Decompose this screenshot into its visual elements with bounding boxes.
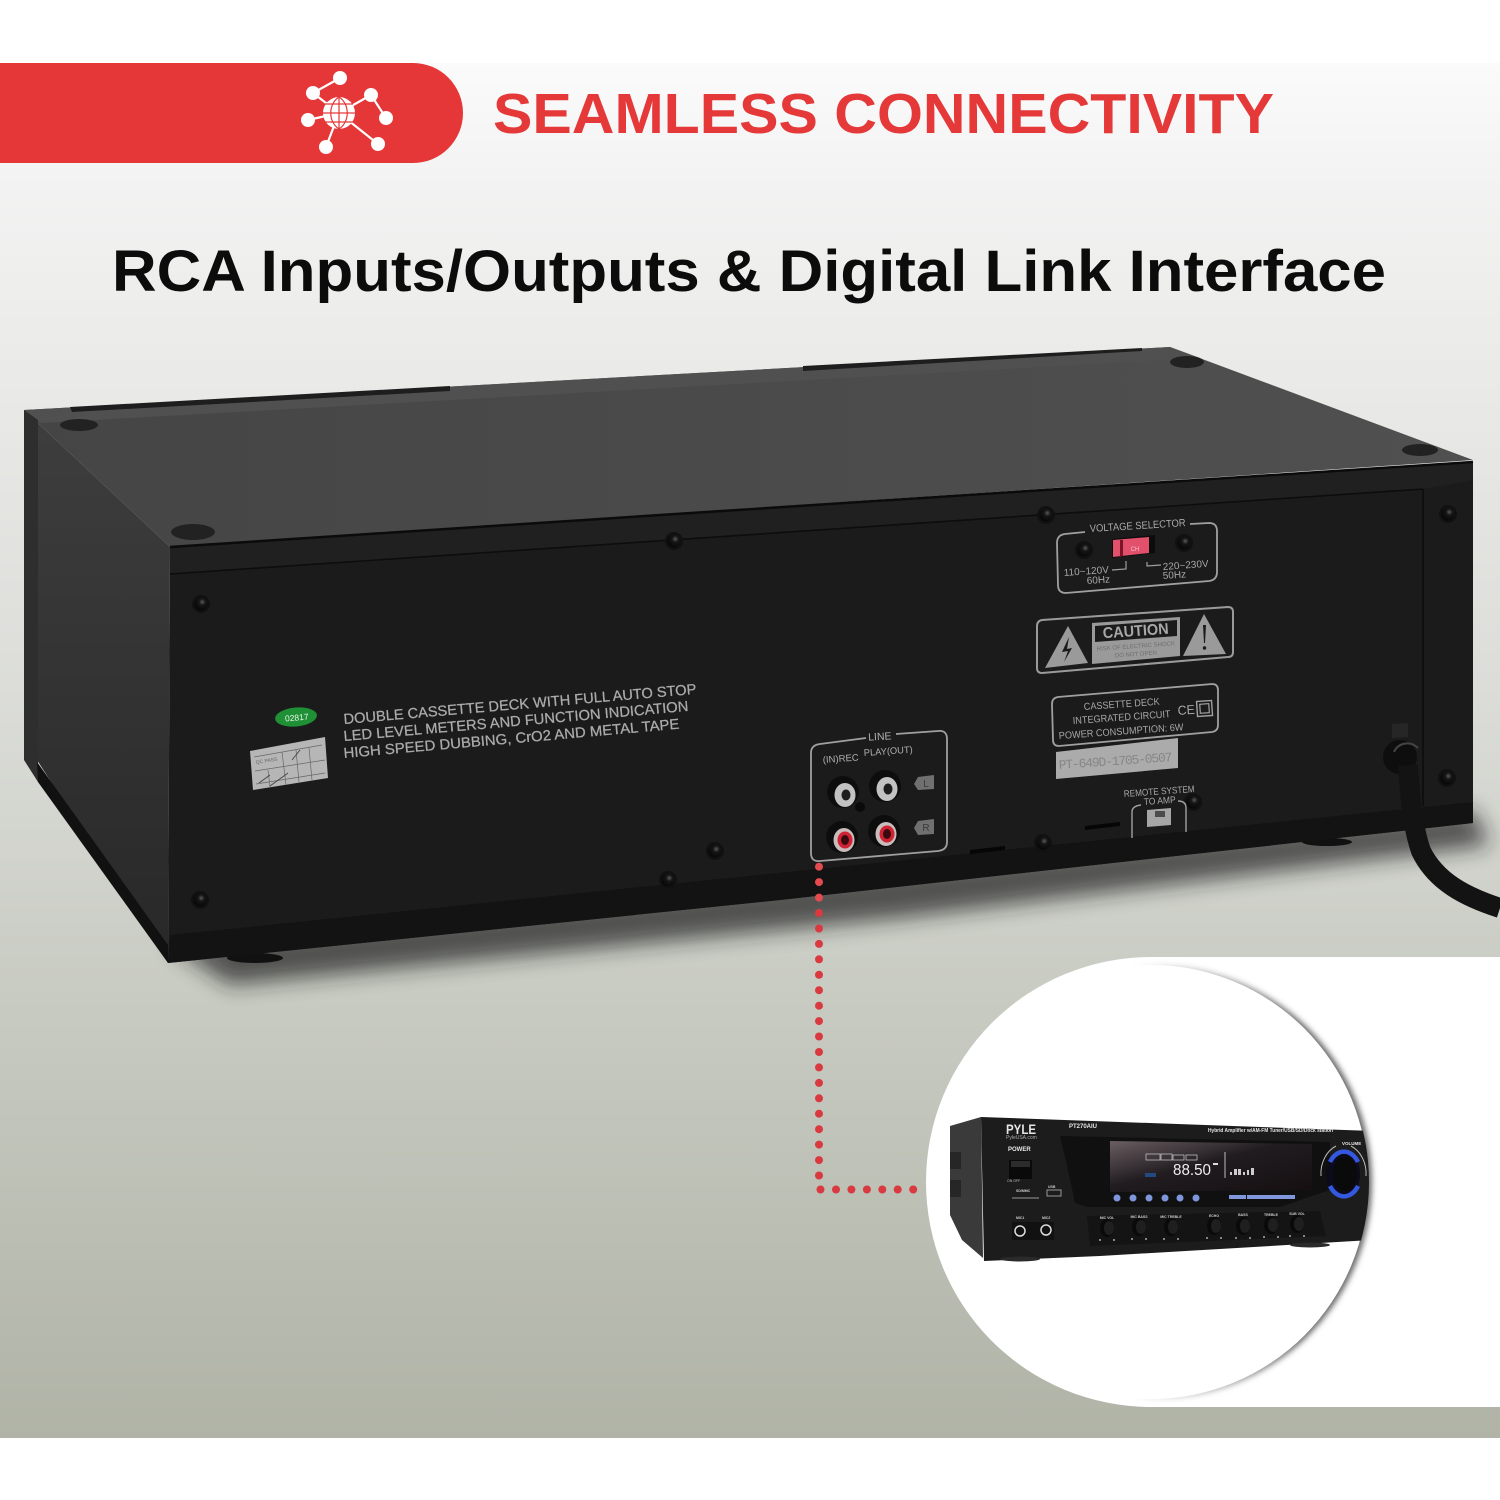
front face [168,462,1473,963]
serial number label: PT-649D-1705-0507 [1058,750,1173,773]
amp branding: VOLUME [1342,1141,1361,1146]
line connector panel: (IN)REC [822,752,859,766]
L and R tags: R [922,823,930,834]
subheading: RCA Inputs/Outputs & Digital Link Interface [112,239,1386,304]
voltage selector: 50Hz [1162,569,1187,582]
RCA jacks [826,770,901,853]
power switch: ON OFF [1007,1179,1020,1183]
control knobs: SUB VOL [1289,1212,1306,1216]
left side panel [24,410,170,963]
circle shadow [1151,964,1376,1400]
display screen: 88.50 [1173,1162,1211,1179]
voltage selector: 60Hz [1086,574,1111,587]
voltage selector: VOLTAGE SELECTOR [1089,517,1186,535]
voltage selector: 110~120V [1063,565,1110,579]
caution panel: CAUTION [1102,621,1169,642]
amp branding: POWER [1008,1147,1031,1153]
description text: LED LEVEL METERS AND FUNCTION INDICATION [343,699,689,745]
device shadow [170,810,1490,985]
L and R tags: L [923,779,929,790]
SD and USB ports: SD/MMC [1016,1189,1031,1193]
remote system port: REMOTE SYSTEM [1123,784,1195,800]
amp branding: PYLE [1006,1121,1036,1137]
display bezel [1060,1136,1330,1207]
amp branding: PT270AIU [1069,1124,1097,1130]
cassette deck info label: POWER CONSUMPTION: 6W [1058,722,1184,742]
line connector panel [811,730,947,861]
control knobs: MIC BASS [1130,1215,1148,1219]
amplifier photo [950,1117,1372,1262]
amp branding [1006,1124,1362,1151]
icon: network globe [301,71,393,154]
red switch: CH [1131,547,1139,553]
green sticker [274,706,318,728]
red switch [1112,535,1155,558]
mic jacks [1012,1216,1054,1240]
control knobs [1087,1211,1326,1246]
white callout backing [926,957,1500,1407]
QC sticker [250,737,328,790]
screws [191,505,1457,909]
amp branding: Hybrid Amplifier w/AM-FM Tuner/USB/SD/Dock station [1208,1128,1334,1134]
control knobs: MIC TREBLE [1160,1215,1182,1219]
cassette deck info label: CASSETTE DECK [1083,697,1160,713]
SD and USB ports [1012,1185,1061,1198]
voltage selector [1057,517,1217,593]
slots [970,822,1120,854]
caution panel: DO NOT OPEN [1115,651,1157,659]
cassette deck info label [1052,684,1218,746]
control knobs: TREBLE [1264,1213,1279,1217]
control knobs: ECHO [1209,1214,1219,1218]
front panel buttons [1114,1194,1295,1202]
remote system port [1123,784,1195,838]
SD and USB ports: USB [1048,1185,1056,1189]
serial number label [1056,738,1178,779]
caution panel [1092,617,1180,664]
L and R tags [914,775,934,835]
power switch [1007,1160,1032,1183]
caution panel: RISK OF ELECTRIC SHOCK [1097,641,1175,653]
amp branding: PyleUSA.com [1006,1135,1037,1141]
device: cassette deck rear [24,347,1500,963]
amp front [981,1117,1372,1261]
voltage selector: 220~230V [1162,559,1209,573]
bottom band [168,802,1473,963]
warning triangle: exclamation [1183,614,1226,656]
mic jacks: MIC1 [1016,1216,1024,1220]
control knobs: MIC VOL [1100,1216,1115,1220]
remote system port: TO AMP [1143,795,1176,808]
volume knob [1321,1146,1366,1198]
feet [227,838,1352,963]
caution label [1037,607,1233,673]
description text: DOUBLE CASSETTE DECK WITH FULL AUTO STOP [343,682,697,728]
line connector panel: LINE [868,730,892,744]
heading: SEAMLESS CONNECTIVITY [493,82,1274,146]
amp side [950,1117,983,1258]
line connector panel: PLAY(OUT) [863,745,913,759]
red dotted connector [815,863,917,1194]
control knobs: BASS [1238,1213,1249,1217]
warning triangle: lightning [1045,626,1088,668]
cassette deck info label: INTEGRATED CIRCUIT [1072,709,1171,727]
top panel [24,347,1473,547]
power cord [1383,723,1500,908]
header bar [0,63,463,163]
mic jacks: MIC2 [1042,1216,1050,1220]
QC sticker: QC PASS [255,757,279,766]
display screen [1110,1141,1312,1192]
description text [343,682,697,762]
description text: HIGH SPEED DUBBING, CrO2 AND METAL TAPE [343,717,680,762]
green sticker: 02817 [285,711,309,724]
cassette deck info label: CE [1177,702,1195,718]
